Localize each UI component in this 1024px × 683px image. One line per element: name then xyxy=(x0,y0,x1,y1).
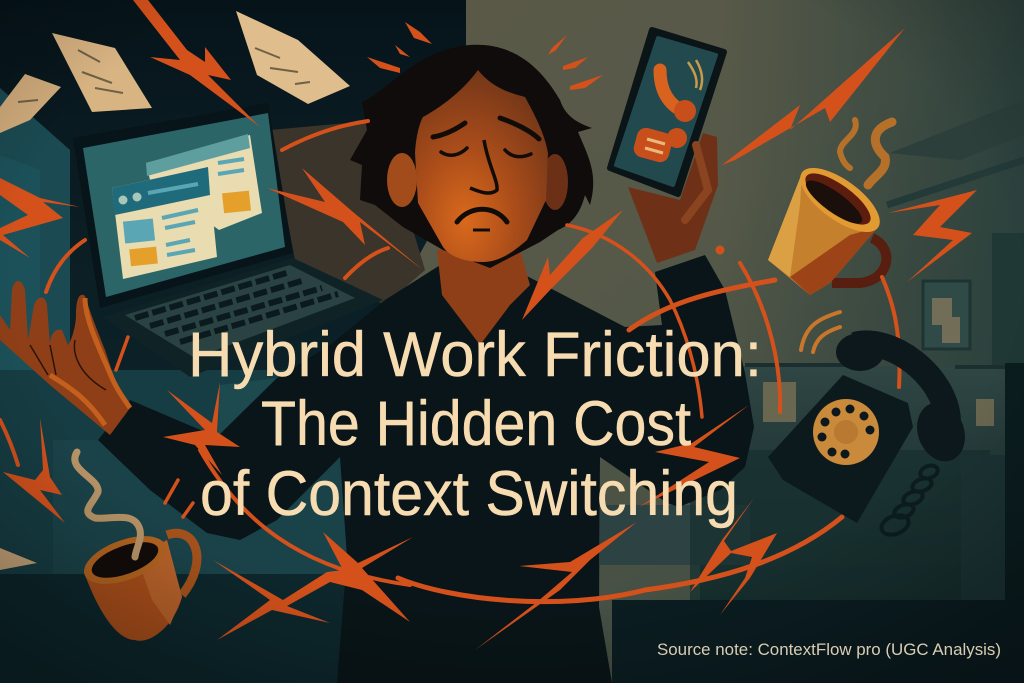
title: The Hidden Cost xyxy=(261,389,691,459)
figure: torso and arms xyxy=(98,255,754,683)
stress arcs xyxy=(0,121,900,602)
title: of Context Switching xyxy=(200,459,738,529)
title xyxy=(188,320,762,529)
icon: phone xyxy=(610,30,724,194)
icon: right coffee mug xyxy=(768,156,890,295)
figure: left hand xyxy=(0,281,130,435)
figure: face xyxy=(415,70,548,262)
laptop xyxy=(73,103,383,377)
figure: ears xyxy=(387,153,568,210)
source note: Source note: ContextFlow pro (UGC Analysis) xyxy=(657,640,1001,659)
icon: left mug steam xyxy=(75,452,140,557)
figure: neck xyxy=(437,250,530,345)
figure: right hand holding phone xyxy=(628,133,718,263)
title: Hybrid Work Friction: xyxy=(188,320,762,390)
icon: rotary telephone xyxy=(768,333,973,538)
icon: coffee steam xyxy=(840,120,892,185)
figure: thumb xyxy=(685,145,708,220)
icon: phone ring marks xyxy=(801,312,840,352)
icon: left coffee mug xyxy=(78,526,197,641)
figure: hair xyxy=(350,45,593,268)
flying papers xyxy=(0,11,350,570)
